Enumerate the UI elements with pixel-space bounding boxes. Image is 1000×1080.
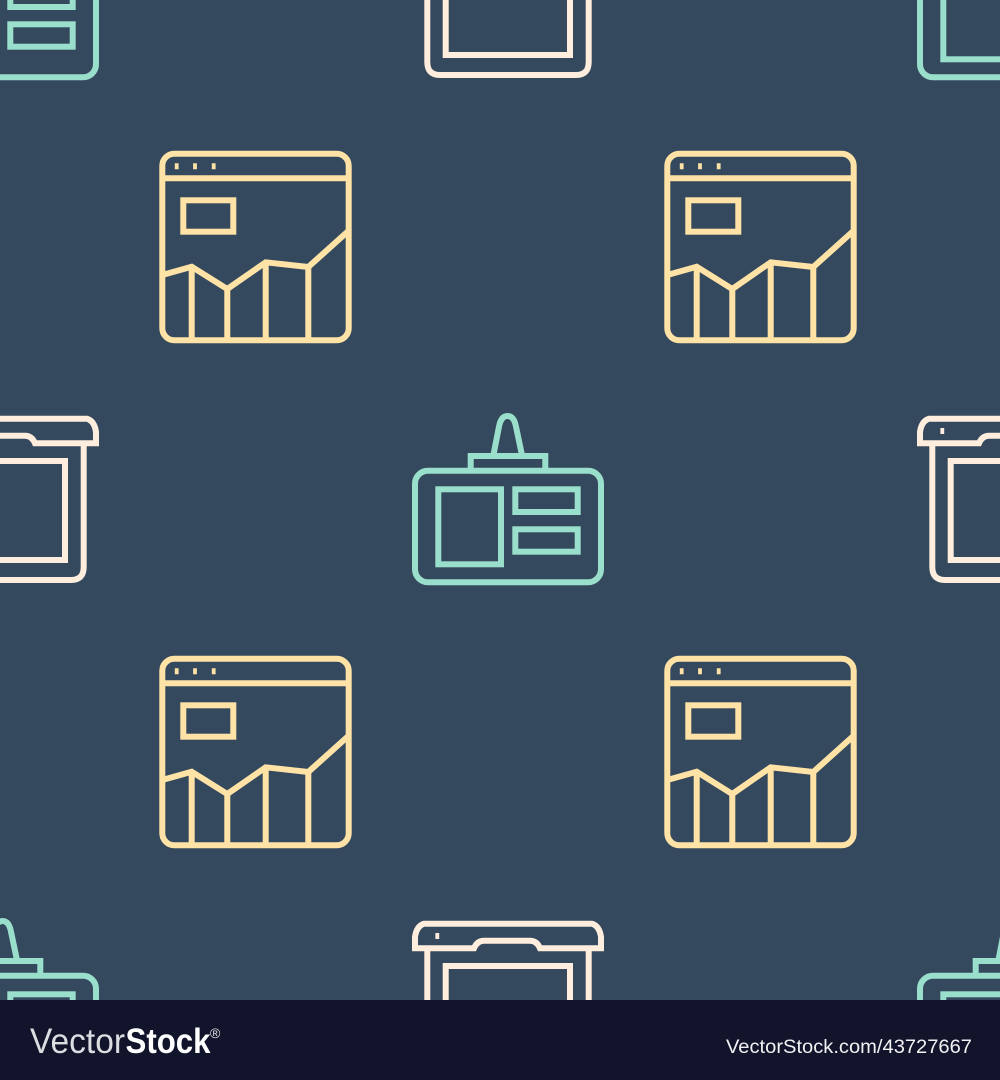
logo: Stock wordmark: Stock: [126, 1022, 211, 1061]
icon: browser chart top left: [162, 154, 349, 340]
icon: browser chart top right: [667, 154, 854, 340]
icon: id badge bottom left: [0, 921, 96, 1080]
icon: printer top center: [415, 0, 601, 75]
icon: id badge bottom right: [920, 921, 1000, 1080]
logo: registered mark: ®: [210, 1025, 221, 1041]
icon: id badge top left: [0, 0, 96, 77]
logo: VectorStock wordmark: Vector: [30, 1022, 125, 1061]
icon: printer right: [920, 419, 1000, 580]
icon: id badge center: [415, 416, 601, 582]
icon: printer left: [0, 419, 96, 580]
icon: browser chart bottom right: [667, 659, 854, 845]
icon: printer bottom center: [415, 924, 601, 1080]
footer image id: VectorStock.com/43727667: [726, 1037, 972, 1058]
footer bar: [0, 1000, 1000, 1080]
icon: id badge top right: [920, 0, 1000, 77]
icon: browser chart bottom left: [162, 659, 349, 845]
